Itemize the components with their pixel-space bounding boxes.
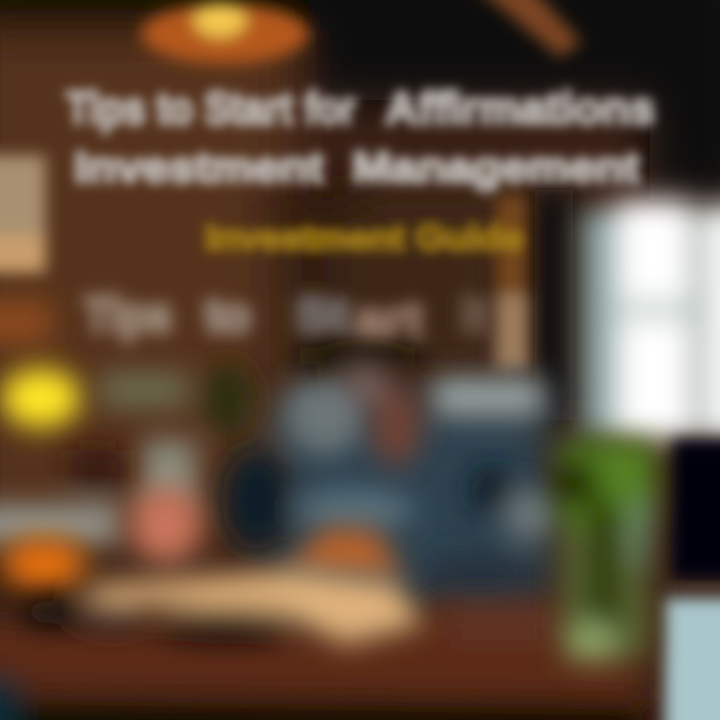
ceiling lamp right [468, 0, 582, 58]
glass vase with plant [558, 440, 656, 662]
orange object [2, 538, 86, 590]
yellow subtitle: Investment Guide [205, 217, 523, 258]
grey text row: it [460, 287, 490, 343]
hand [130, 487, 202, 563]
dark column beside window [535, 190, 573, 420]
ceiling lamp left [141, 3, 309, 64]
table [0, 600, 642, 720]
shirt cuff orange [285, 528, 405, 575]
brick wall background [0, 0, 720, 550]
title: Affirmations [385, 82, 655, 134]
grey text row: Tips [84, 287, 172, 343]
title: Tips to Start for [66, 82, 356, 134]
white band left [0, 450, 125, 543]
person in denim shirt [222, 345, 556, 600]
dark right furniture [664, 440, 720, 720]
wooden column [495, 195, 529, 370]
grey text row: St [295, 287, 349, 343]
grey text row: art [355, 291, 423, 347]
title: Management [352, 143, 640, 192]
wall picture [0, 155, 46, 273]
title: Investment [74, 143, 324, 192]
orange wall patch [0, 300, 52, 344]
window [582, 200, 720, 440]
grey text row: to [205, 287, 251, 343]
face [300, 345, 422, 467]
open book [21, 570, 425, 645]
title [66, 82, 655, 192]
desk plants left [100, 364, 252, 508]
grey text row [84, 287, 490, 347]
yellow lamp [1, 368, 81, 428]
